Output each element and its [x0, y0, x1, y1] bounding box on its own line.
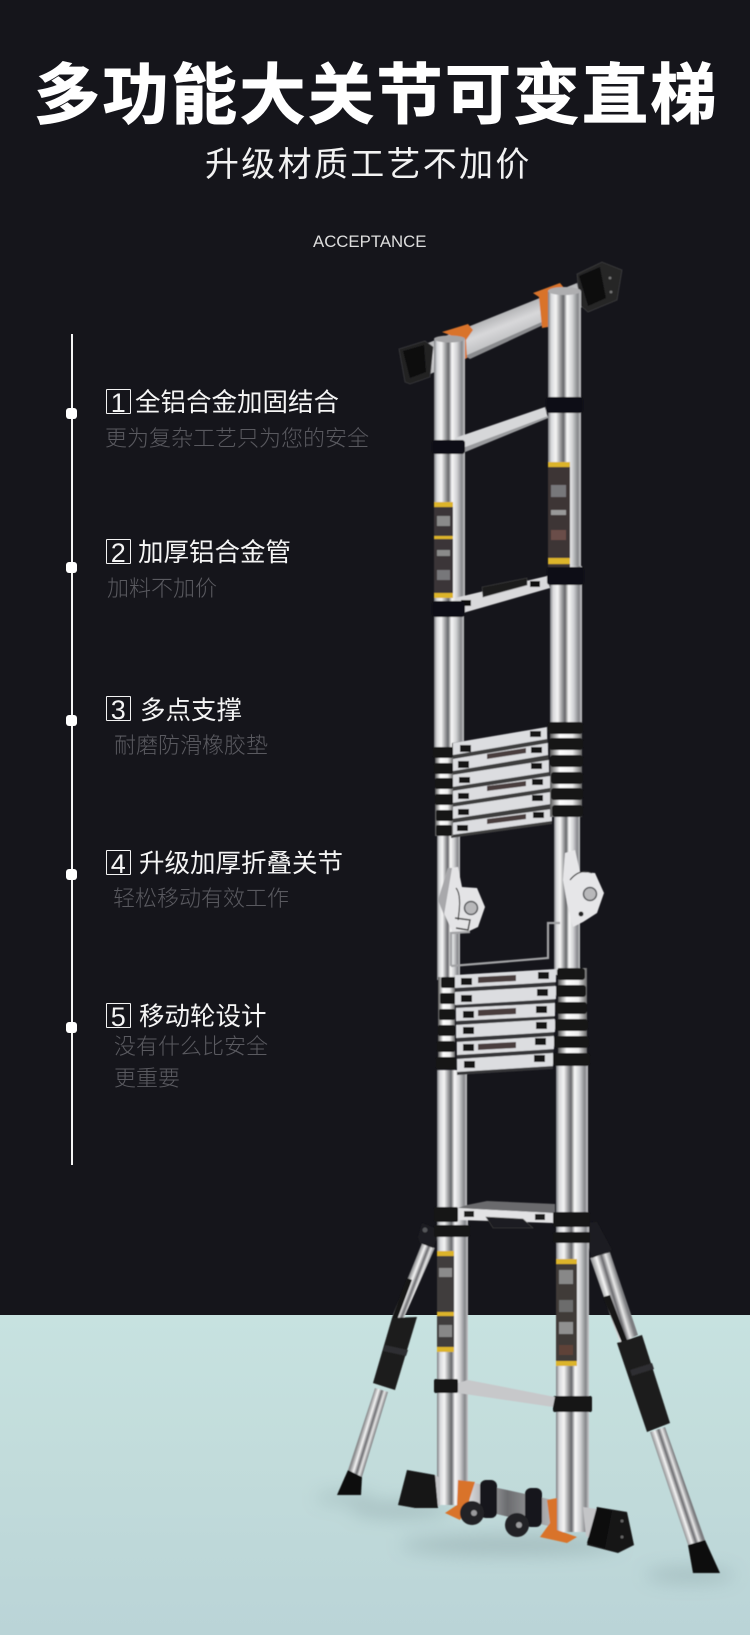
- wheel right: [505, 1513, 529, 1537]
- feature 3: 耐磨防滑橡胶垫: [114, 733, 268, 758]
- top end cap left: [399, 341, 433, 384]
- subtitle: 升级材质工艺不加价: [205, 146, 532, 184]
- feature 5: 移动轮设计: [139, 1003, 267, 1031]
- timeline: [66, 334, 77, 1165]
- wire handle: [451, 923, 560, 966]
- upper rungs: [455, 407, 550, 613]
- band stack lower left: [436, 977, 456, 1069]
- lower rung: [458, 1380, 555, 1407]
- feature 4: 升级加厚折叠关节: [139, 850, 343, 878]
- band stack upper right: [548, 722, 583, 817]
- feature 4: 轻松移动有效工作: [113, 886, 289, 911]
- band stack lower right: [553, 968, 590, 1066]
- safety sticker lower right: [556, 1259, 577, 1366]
- orange base right: [540, 1498, 577, 1543]
- safety sticker upper right: [548, 462, 570, 567]
- base cap left: [398, 1470, 440, 1508]
- wheel bracket right: [525, 1488, 542, 1527]
- folded rung stack upper: [451, 727, 552, 838]
- top crossbar: [428, 283, 582, 375]
- bands on upper rails: [432, 397, 584, 617]
- lower bands: [434, 1207, 592, 1412]
- title: 多功能大关节可变直梯: [34, 58, 719, 132]
- right rail: [548, 287, 589, 1532]
- floor shadows: [315, 1493, 735, 1582]
- feature 5: [106, 1002, 268, 1091]
- orange bracket left: [442, 324, 473, 363]
- folded rung stack lower: [455, 969, 556, 1075]
- feature 4: [106, 850, 343, 911]
- feature 2: 加料不加价: [107, 576, 217, 601]
- feature 2: 加厚铝合金管: [138, 539, 291, 567]
- folding hinge right: [563, 850, 604, 927]
- left stabiliser leg: [337, 1223, 437, 1495]
- feature 1: 全铝合金加固结合: [135, 389, 339, 417]
- ladder artwork: [337, 262, 720, 1573]
- feature 1: 更为复杂工艺只为您的安全: [105, 426, 369, 451]
- feature 3: [106, 696, 268, 758]
- orange bracket right: [533, 283, 565, 328]
- feature 5: 更重要: [114, 1066, 180, 1091]
- orange base left: [445, 1480, 475, 1520]
- feature 3: 多点支撑: [140, 697, 242, 725]
- floor: [0, 1315, 750, 1635]
- wheel axle bar: [470, 1482, 553, 1527]
- feature 5: 没有什么比安全: [114, 1034, 268, 1059]
- platform step: [458, 1201, 555, 1228]
- right stabiliser leg: [582, 1222, 720, 1573]
- feature 2: [106, 538, 291, 601]
- band stack upper left: [433, 747, 453, 836]
- folding hinge left: [438, 867, 485, 933]
- wheel bracket left: [480, 1480, 497, 1518]
- base cap right: [583, 1507, 634, 1553]
- top end cap right: [577, 262, 622, 312]
- left rail: [434, 336, 468, 1505]
- feature 1: [105, 388, 369, 451]
- safety sticker lower left: [437, 1251, 454, 1352]
- wheel left: [460, 1501, 484, 1525]
- safety sticker upper left: [434, 502, 453, 598]
- label: ACCEPTANCE: ACCEPTANCE: [313, 232, 426, 251]
